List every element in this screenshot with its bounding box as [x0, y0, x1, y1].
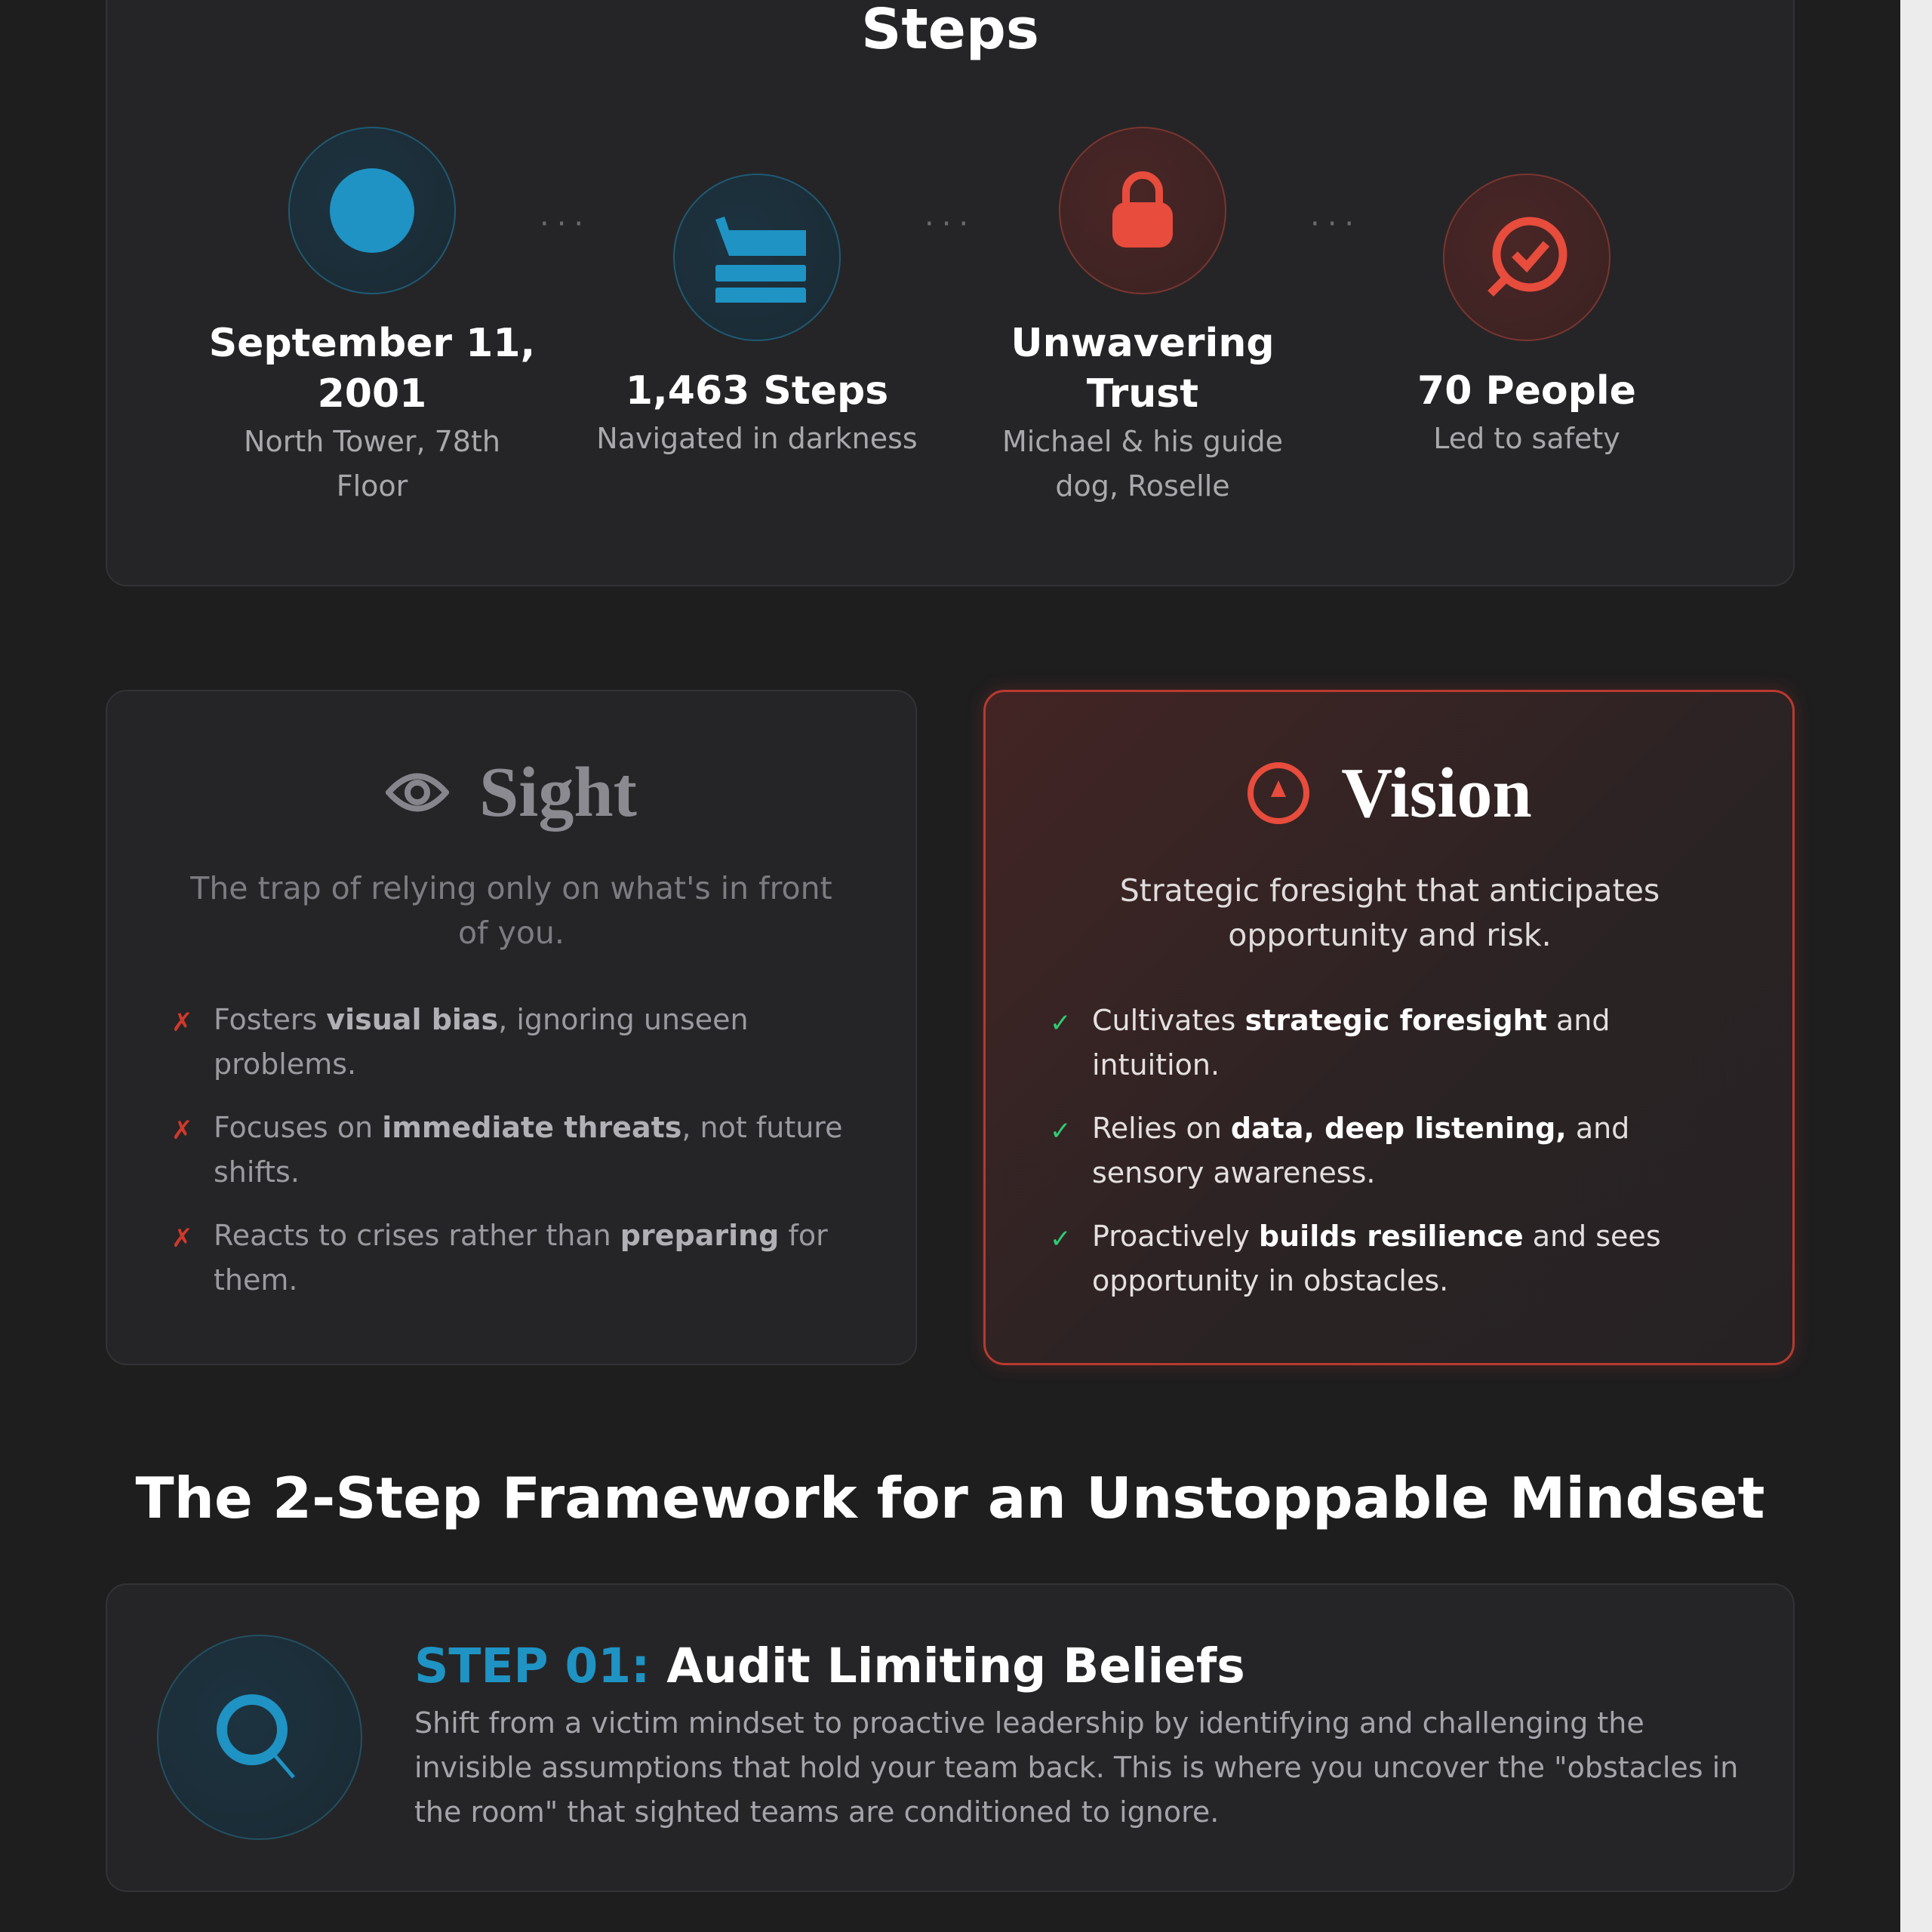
panel: vision: ✓	[1050, 1224, 1072, 1254]
arrow: dots 3: ···	[1310, 207, 1361, 242]
list: vision bullets	[1050, 1004, 1661, 1297]
panel: sight: ✗	[171, 1223, 193, 1254]
stat: steps	[596, 368, 918, 455]
icon: lock	[1059, 127, 1226, 294]
stat: trust: Michael & his guide dog, Roselle	[1002, 425, 1283, 503]
panel: sight	[106, 690, 917, 1365]
list: vision bullets: Relies on data, deep listening, and sensory awareness.	[1092, 1112, 1629, 1189]
icon: dot circle	[288, 127, 456, 294]
stat: steps: 1,463 Steps	[626, 368, 888, 414]
arrow: dots 2: ···	[924, 207, 976, 242]
icon: check search	[1443, 174, 1611, 341]
heading: sight	[386, 753, 637, 832]
arrow: dots 1: ···	[540, 207, 591, 242]
panel: vision	[983, 690, 1795, 1365]
stat: people	[1417, 368, 1636, 455]
heading: framework: The 2-Step Framework for an Unstoppable Mindset	[135, 1465, 1765, 1531]
list: sight bullets: Fosters visual bias, ignoring unseen problems.	[214, 1003, 749, 1081]
icon: stairs	[673, 174, 841, 341]
stat: date: September 11, 2001	[209, 321, 535, 417]
right scrollbar strip	[1900, 0, 1932, 1932]
stat: date	[209, 321, 535, 503]
list: sight bullets: Reacts to crises rather than preparing for them.	[214, 1219, 828, 1297]
stat: people: Led to safety	[1433, 422, 1620, 455]
text: vision description: Strategic foresight that anticipates opportunity and risk.	[1120, 872, 1660, 953]
text: step title: STEP 01: Audit Limiting Beliefs	[414, 1638, 1245, 1694]
stat: people: 70 People	[1417, 368, 1636, 414]
stat: trust	[1002, 321, 1283, 503]
panel: timeline steps	[106, 0, 1795, 586]
stat: trust: Unwavering Trust	[1011, 321, 1275, 417]
list: vision bullets: Cultivates strategic foresight and intuition.	[1092, 1004, 1610, 1081]
heading: vision	[1247, 754, 1532, 832]
heading: sight: Sight	[479, 753, 637, 832]
heading: vision: Vision	[1341, 754, 1532, 832]
panel: vision: ✓	[1050, 1116, 1072, 1146]
icon: magnifier	[157, 1635, 362, 1840]
list: vision bullets: Proactively builds resilience and sees opportunity in obstacles.	[1092, 1220, 1661, 1297]
list: sight bullets: Focuses on immediate threats, not future shifts.	[214, 1111, 842, 1189]
panel: vision: ✓	[1050, 1008, 1072, 1038]
stat: steps: Navigated in darkness	[596, 422, 918, 455]
panel: sight: ✗	[171, 1115, 193, 1146]
text: step body: Shift from a victim mindset to proactive leadership by identifying and challenging the invisible assumptions that hold your team back. This is where you uncover the "obstacles in the room" that sighted teams are conditioned to ignore.	[414, 1706, 1738, 1829]
panel: sight: ✗	[171, 1008, 193, 1038]
list: sight bullets	[171, 1003, 842, 1297]
stat: date: North Tower, 78th Floor	[244, 425, 500, 503]
panel: step 01	[106, 1583, 1795, 1892]
text: sight description: The trap of relying only on what's in front of you.	[190, 870, 832, 951]
